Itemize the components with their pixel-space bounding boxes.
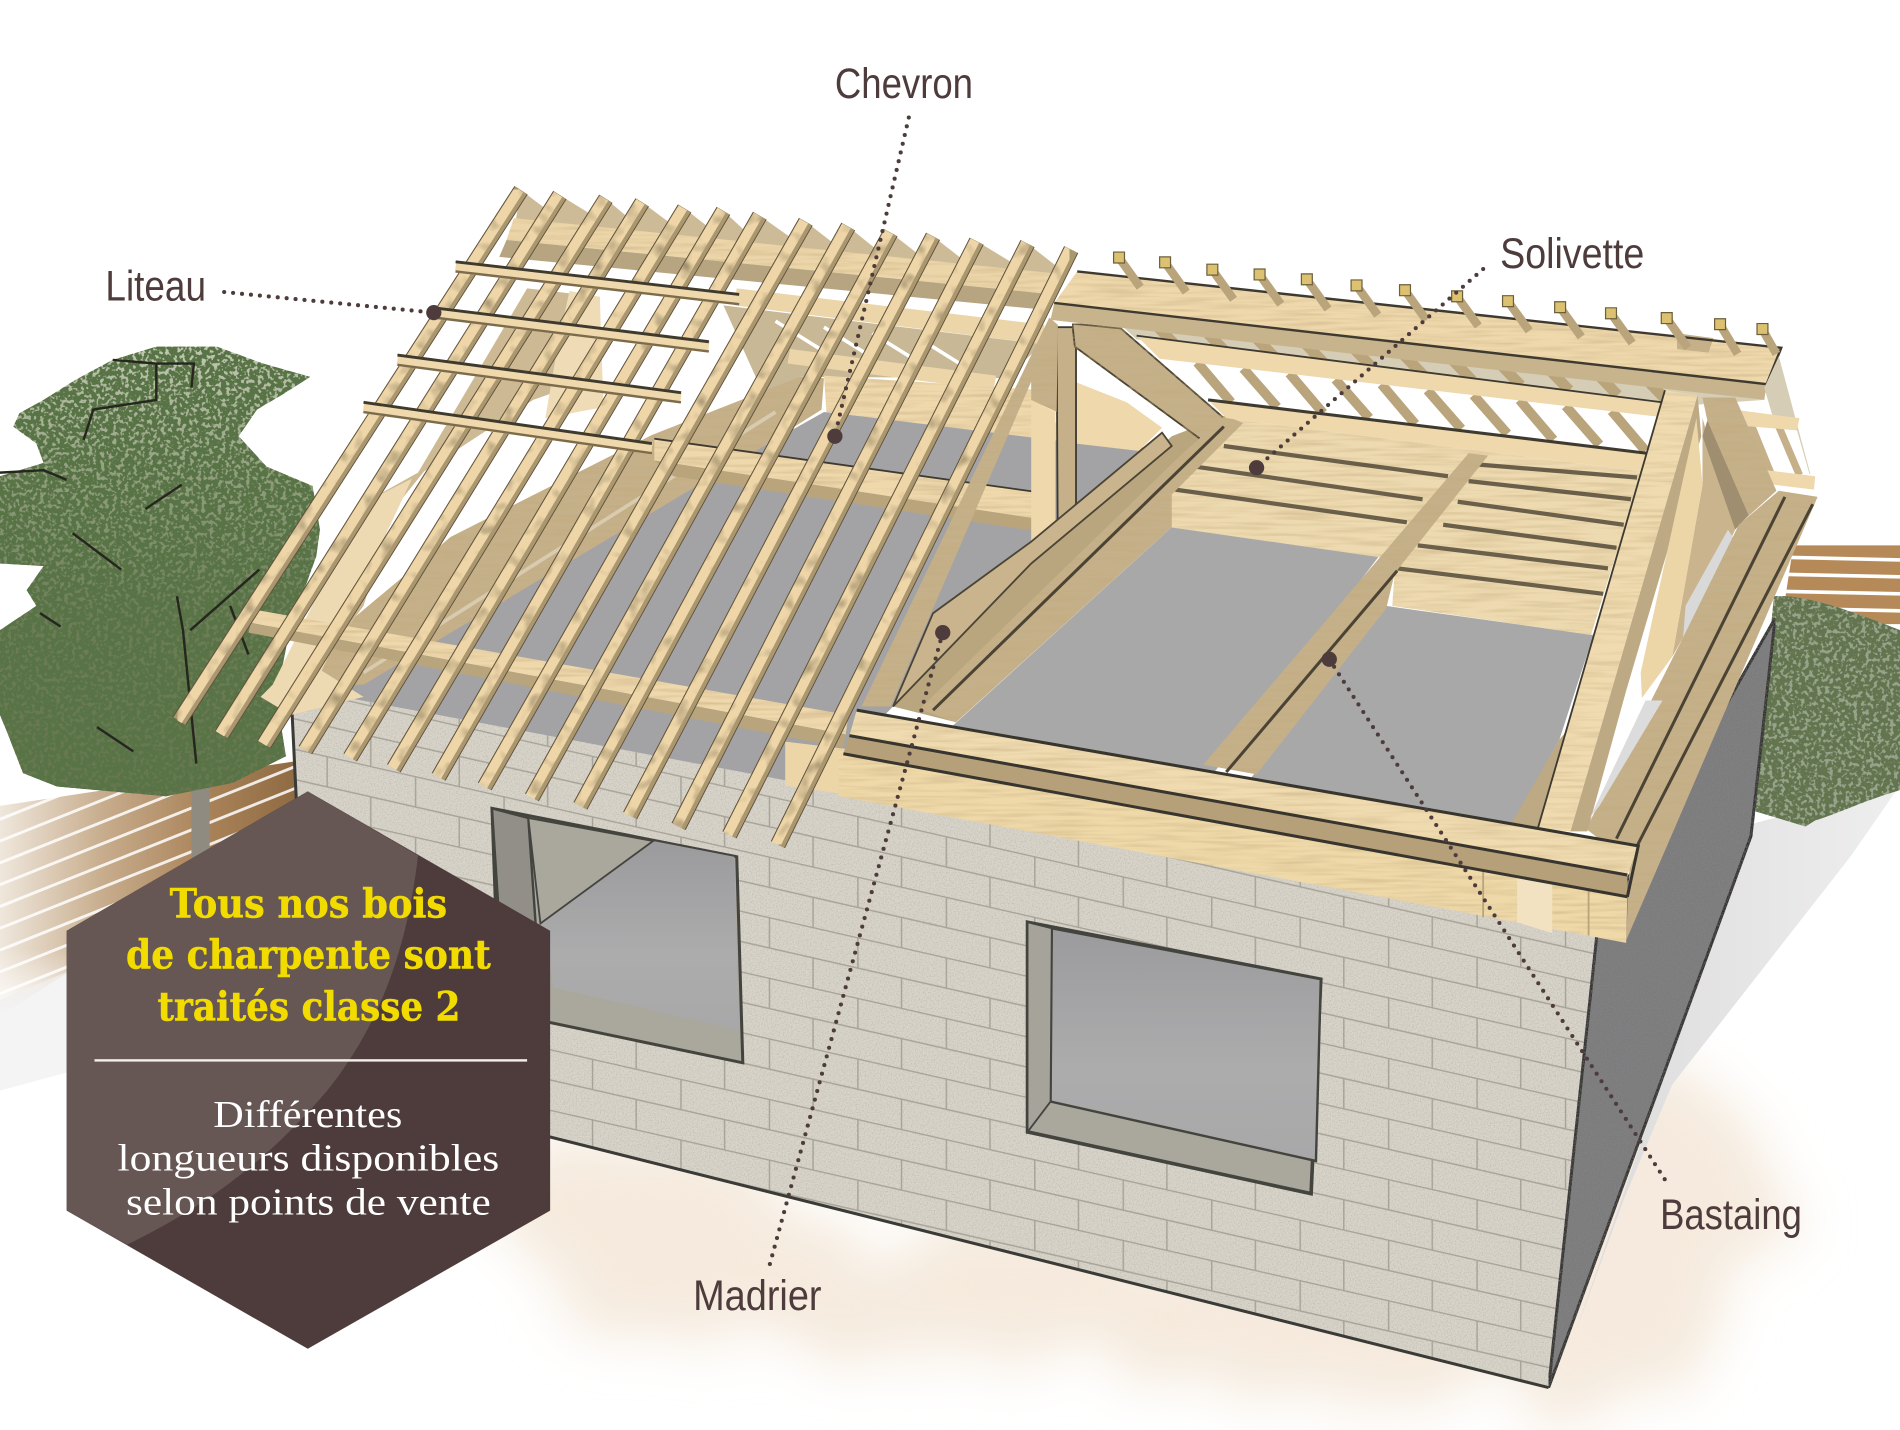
tree — [0, 347, 320, 860]
chevrons: long rafters — [178, 190, 1071, 845]
front wall: concrete blocks — [291, 687, 1597, 1388]
liteaux: battens — [364, 262, 739, 453]
callout body text: selon points de vente — [126, 1182, 491, 1223]
callout hexagon — [67, 791, 550, 1349]
labels: Liteau — [105, 263, 206, 310]
left fence — [0, 700, 298, 1091]
right fence — [1781, 545, 1900, 624]
callout body text: longueurs disponibles — [118, 1139, 499, 1180]
left window — [492, 808, 743, 1063]
solivette back wall — [1169, 418, 1642, 635]
right gable truss — [1511, 356, 1818, 940]
middle purlin — [654, 439, 1054, 533]
callout body text: Différentes — [213, 1095, 402, 1136]
right side: grey ceiling — [951, 527, 1593, 826]
tree trunk — [173, 773, 210, 860]
callout heading: traités classe 2 — [158, 983, 460, 1030]
ridge beams — [1051, 271, 1781, 471]
callout heading — [126, 880, 491, 1030]
leader: Chevron — [827, 118, 909, 444]
labels: Madrier — [693, 1272, 822, 1319]
labels: Chevron — [835, 60, 973, 107]
side wall — [1549, 618, 1775, 1388]
left roof: truss and purlins behind rafters — [261, 190, 1139, 715]
ground shadow — [1575, 785, 1900, 1333]
leader: Solivette — [1249, 269, 1483, 475]
callout heading: de charpente sont — [126, 931, 491, 978]
leader: Liteau — [224, 292, 441, 320]
joists between ridge beams — [1121, 320, 1764, 451]
leader: Madrier — [768, 625, 950, 1270]
labels: Bastaing — [1660, 1191, 1802, 1238]
right window — [1028, 922, 1321, 1194]
right bush — [1753, 596, 1900, 826]
labels: Solivette — [1500, 230, 1644, 277]
ground wash — [497, 1066, 1781, 1406]
leader: Bastaing — [1322, 652, 1669, 1185]
left gable truss — [862, 318, 1243, 722]
bastaing: central floor beam — [1203, 453, 1488, 774]
front wall plate (madrier) — [839, 710, 1638, 943]
labels — [105, 60, 1802, 1319]
callout body text — [118, 1095, 499, 1223]
rafter stubs along ridge — [1114, 252, 1776, 354]
callout heading: Tous nos bois — [170, 880, 447, 927]
lower left eave beam — [248, 610, 848, 794]
left roof: grey ceiling deck — [339, 412, 1151, 806]
